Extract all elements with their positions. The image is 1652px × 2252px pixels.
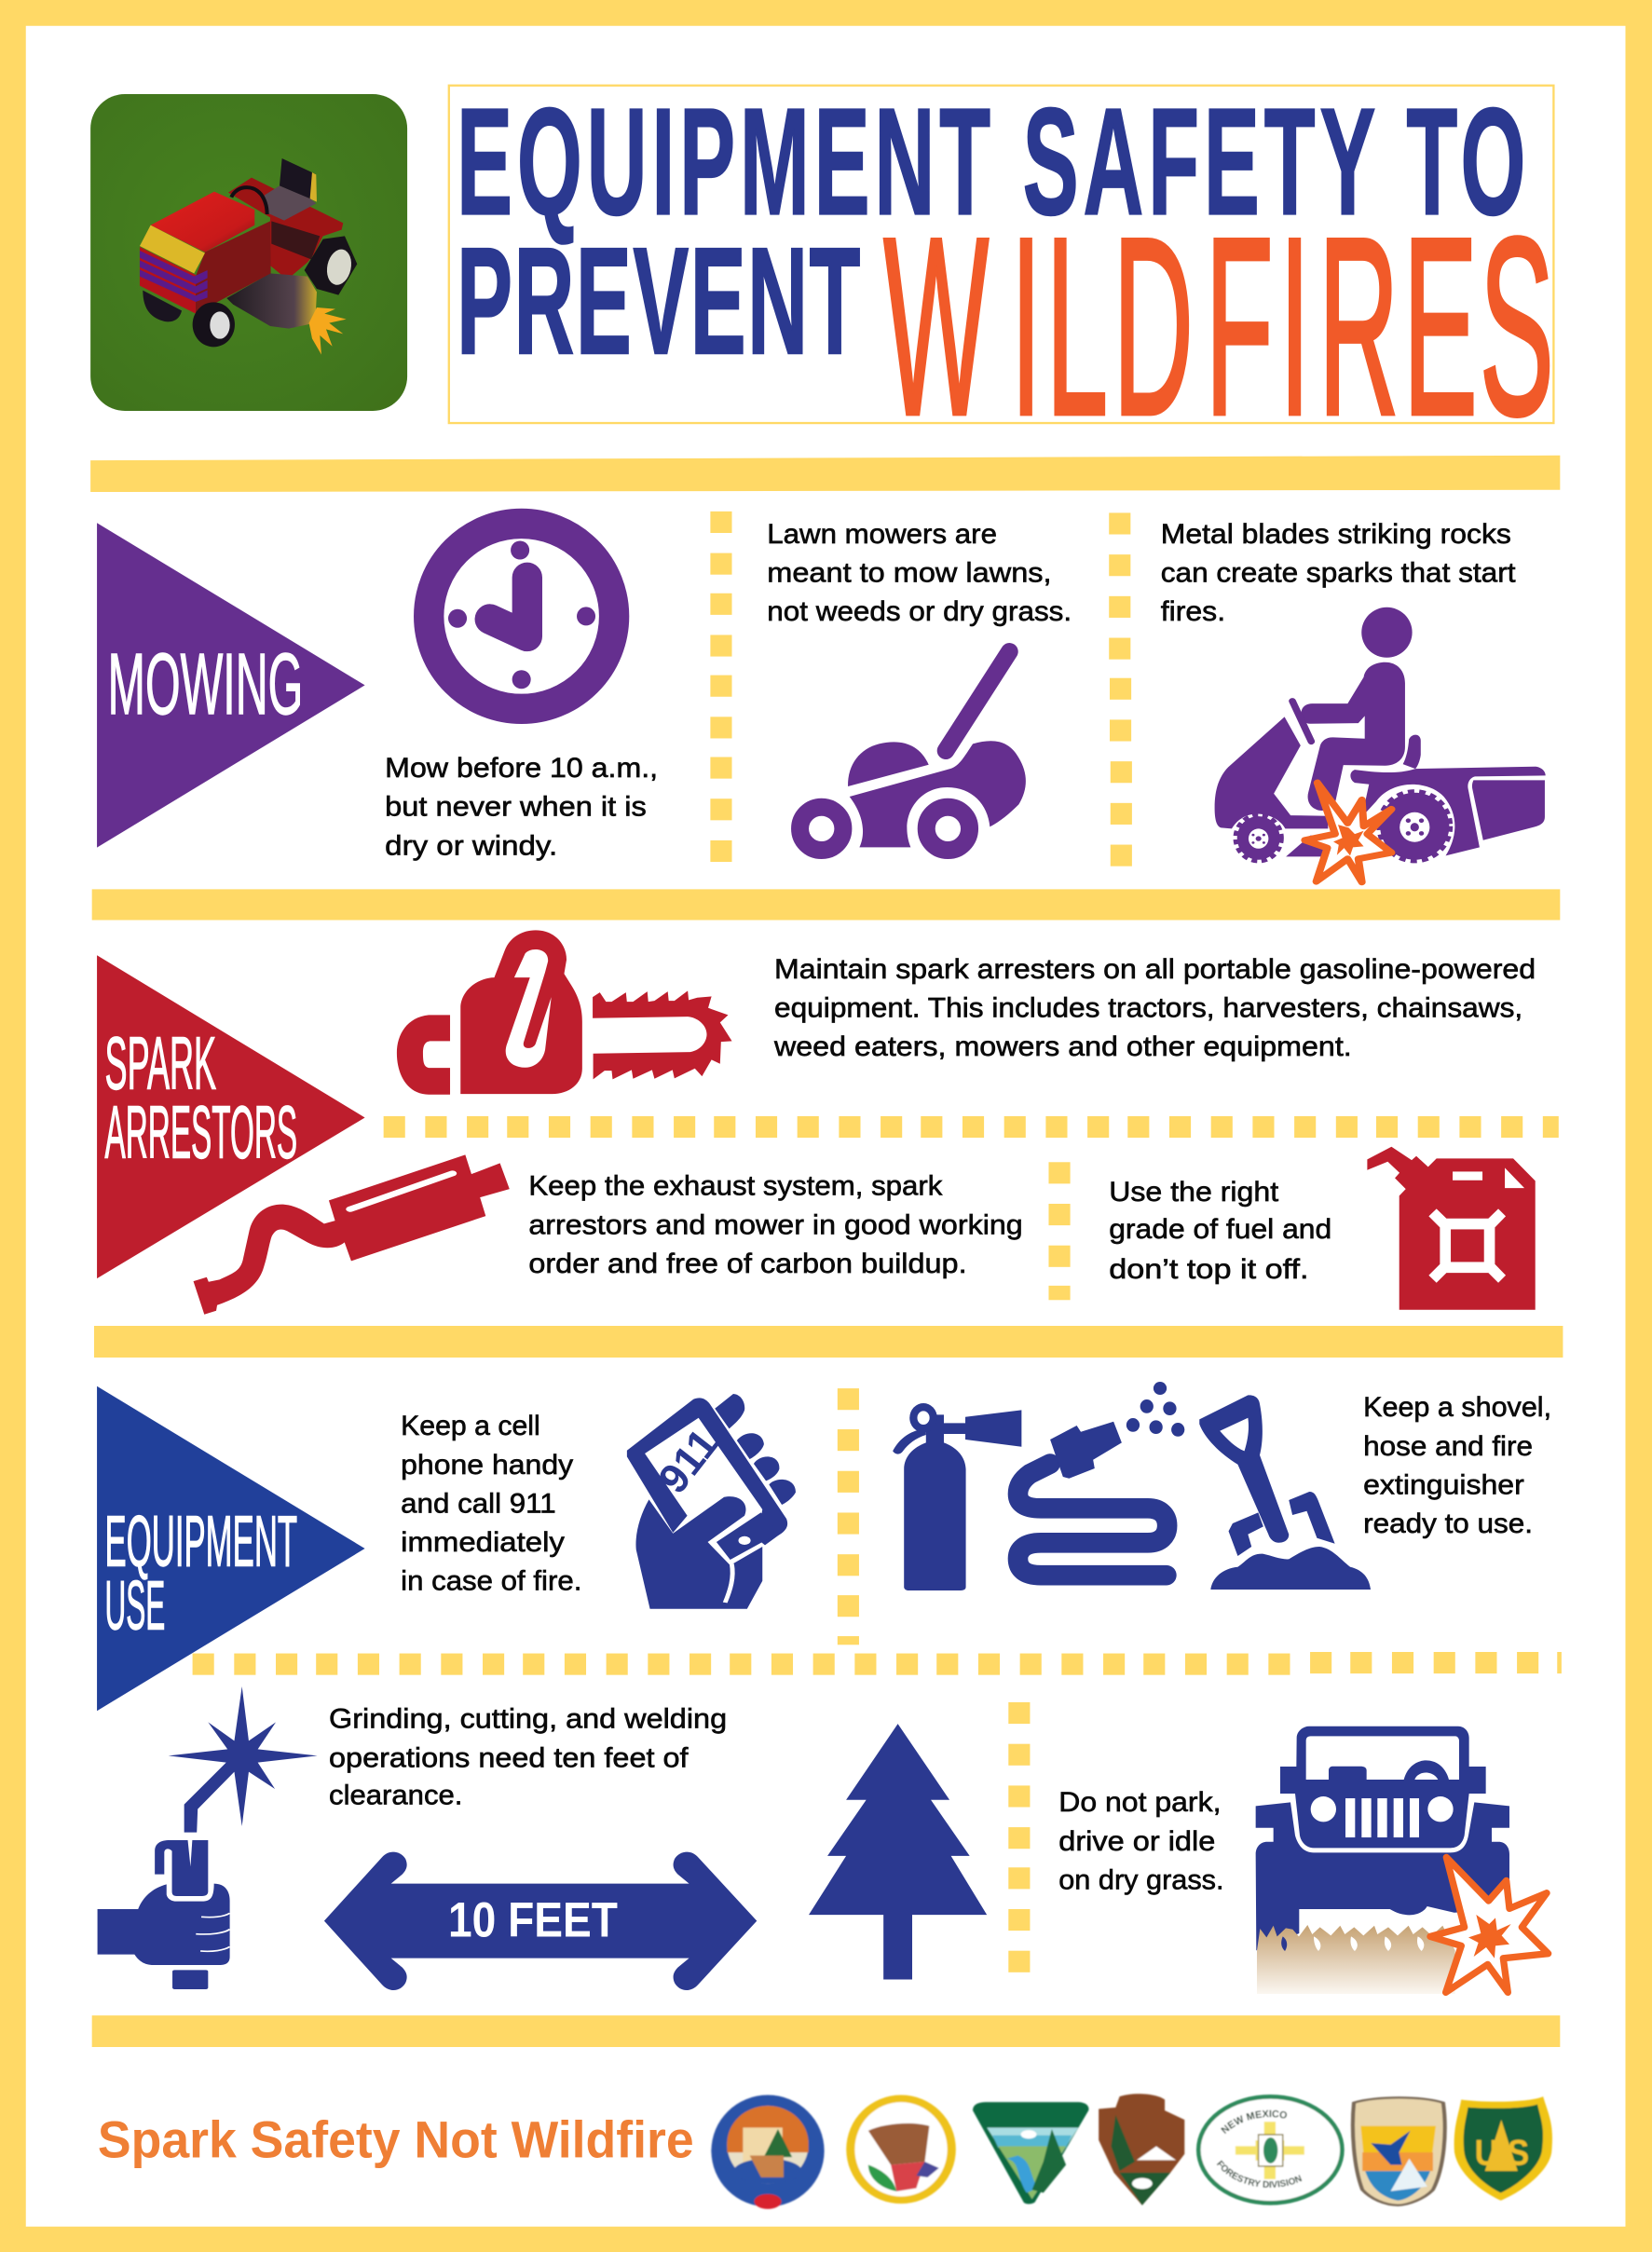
text: use the right grade of fuel xyxy=(1109,1177,1331,1285)
icon: welding torch in hand xyxy=(98,1686,318,1989)
panel: spark arrestors xyxy=(97,930,1559,1315)
heading triangle: equipment use: USE xyxy=(105,1566,165,1644)
icon: hand holding phone dialing 911 xyxy=(627,1394,796,1609)
icon: hand holding phone dialing 911: 911 xyxy=(650,1421,728,1502)
heading triangle: equipment use xyxy=(97,1386,365,1711)
icon: muffler exhaust xyxy=(194,1154,510,1315)
text: lawn mowers: meant to mow lawns, xyxy=(767,557,1052,588)
text: keep a shovel xyxy=(1363,1392,1551,1539)
text: keep the exhaust system: Keep the exhaust system, spark xyxy=(528,1171,943,1202)
logo: Bureau of Land Management xyxy=(973,2102,1088,2204)
footer slogan: Spark Safety Not Wildfire xyxy=(98,2111,694,2169)
icon: shovel in dirt xyxy=(1199,1395,1371,1590)
yellow divider bar 1 xyxy=(90,456,1560,492)
title line: Prevent: PREVENT xyxy=(457,216,860,386)
heading triangle: spark arrestors xyxy=(97,955,365,1278)
heading triangle: spark arrestors: SPARK xyxy=(105,1021,216,1105)
yellow divider bar 2 xyxy=(92,889,1560,920)
icon: push lawn mower xyxy=(800,651,1026,851)
panel: equipment use xyxy=(97,1382,1562,1994)
logo: New Mexico Forestry Division: FORESTRY DIVISION xyxy=(1216,2160,1303,2189)
icon: fire extinguisher xyxy=(893,1403,1021,1590)
heading triangle: mowing xyxy=(97,523,365,848)
icon: water hose xyxy=(1017,1382,1184,1576)
text: keep the exhaust system: order and free of carbon buildup. xyxy=(528,1249,967,1279)
text: keep a cell phone handy: and call 911 xyxy=(401,1488,556,1519)
text: metal blades: can create sparks that start xyxy=(1161,557,1516,588)
logo: Arizona forestry and fire management xyxy=(711,2095,825,2209)
logo: New Mexico Forestry Division xyxy=(1195,2093,1345,2206)
text: keep a shovel: Keep a shovel, xyxy=(1363,1392,1551,1423)
icon: pine tree xyxy=(809,1724,987,1980)
logo: Fish and Wildlife Service xyxy=(1353,2097,1445,2205)
text: metal blades xyxy=(1161,519,1516,627)
arrow: 10 feet xyxy=(324,1852,757,1990)
heading triangle: mowing: MOWING xyxy=(108,635,303,732)
text: mow before 10 am: but never when it is xyxy=(385,792,647,823)
text: use the right grade of fuel: don’t top it off. xyxy=(1109,1254,1309,1285)
text: maintain spark arresters: equipment. This includes tractors, harvesters, chainsaws, xyxy=(774,993,1522,1024)
text: grinding cutting welding: Grinding, cutting, and welding xyxy=(329,1704,727,1735)
text: keep a cell phone handy: in case of fire. xyxy=(401,1566,581,1597)
text: keep a shovel: ready to use. xyxy=(1363,1508,1533,1539)
text: mow before 10 am xyxy=(385,753,658,861)
heading triangle: equipment use: EQUIPMENT xyxy=(105,1502,297,1582)
text: do not park: on dry grass. xyxy=(1058,1864,1224,1895)
text: keep a cell phone handy xyxy=(401,1411,581,1597)
text: lawn mowers xyxy=(767,519,1072,627)
heading triangle: spark arrestors: ARRESTORS xyxy=(105,1090,297,1174)
text: keep a cell phone handy: immediately xyxy=(401,1527,565,1558)
icon: jeep on dry grass with spark xyxy=(1256,1727,1549,1994)
text: grinding cutting welding: clearance. xyxy=(329,1780,462,1810)
text: mow before 10 am: dry or windy. xyxy=(385,830,557,861)
icon: chainsaw xyxy=(397,930,732,1095)
text: do not park: drive or idle xyxy=(1058,1826,1215,1857)
logo: Department of the Interior xyxy=(846,2095,956,2204)
text: maintain spark arresters xyxy=(773,954,1536,1062)
text: metal blades: fires. xyxy=(1161,596,1225,627)
yellow divider bar 4 xyxy=(92,2015,1560,2047)
text: mow before 10 am: Mow before 10 a.m., xyxy=(385,753,658,784)
title line: Equipment Safety To: EQUIPMENT SAFETY TO xyxy=(457,76,1525,246)
text: do not park xyxy=(1058,1787,1224,1895)
text: maintain spark arresters: Maintain spark arresters on all portable gasoline-powered xyxy=(774,954,1536,985)
logo: US Forest Service xyxy=(1454,2096,1552,2201)
text: lawn mowers: Lawn mowers are xyxy=(767,519,997,550)
yellow divider bar 3 xyxy=(94,1326,1563,1358)
text: maintain spark arresters: weed eaters, mowers and other equipment. xyxy=(773,1031,1352,1062)
text: use the right grade of fuel: Use the right xyxy=(1109,1177,1279,1208)
icon: clock xyxy=(429,524,614,709)
image: riding mower on grass xyxy=(90,94,407,411)
text: keep a cell phone handy: phone handy xyxy=(401,1450,573,1481)
text: grinding cutting welding xyxy=(329,1704,727,1810)
text: metal blades: Metal blades striking rocks xyxy=(1161,519,1511,550)
text: lawn mowers: not weeds or dry grass. xyxy=(767,596,1072,627)
icon: riding mower with spark xyxy=(1215,607,1546,882)
text: keep a shovel: hose and fire xyxy=(1363,1431,1533,1462)
agency logos row xyxy=(710,2093,1554,2210)
text: grinding cutting welding: operations need ten feet of xyxy=(329,1742,689,1773)
text: use the right grade of fuel: grade of fuel and xyxy=(1109,1214,1331,1245)
text: keep a shovel: extinguisher xyxy=(1363,1469,1524,1500)
logo: US Forest Service: U S xyxy=(1475,2133,1529,2173)
panel: mowing xyxy=(97,512,1546,882)
arrow: 10 feet: 10 FEET xyxy=(448,1893,618,1947)
text: do not park: Do not park, xyxy=(1058,1787,1221,1818)
icon: fuel can xyxy=(1367,1147,1536,1310)
logo: New Mexico Forestry Division: NEW MEXICO xyxy=(1221,2109,1288,2135)
text: keep the exhaust system: arrestors and mower in good working xyxy=(528,1209,1023,1240)
title box xyxy=(449,76,1554,468)
text: keep a cell phone handy: Keep a cell xyxy=(401,1411,540,1441)
text: keep the exhaust system xyxy=(528,1171,1023,1279)
logo: National Park Service xyxy=(1099,2094,1184,2205)
title word: Wildfires: WILDFIRES xyxy=(883,185,1554,468)
